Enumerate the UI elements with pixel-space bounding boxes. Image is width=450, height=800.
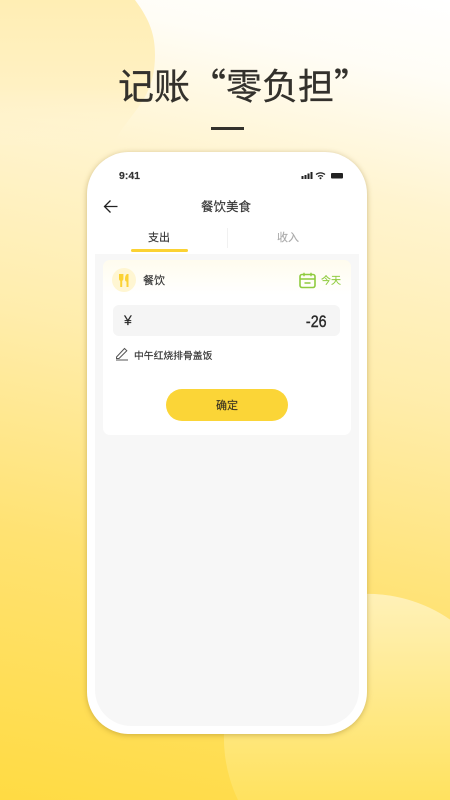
calendar icon xyxy=(299,272,316,288)
tab: expense: 支出 xyxy=(148,232,170,244)
confirm button: 确定 xyxy=(216,400,238,412)
tab: income: 收入 xyxy=(277,232,299,244)
tab: expense xyxy=(131,232,188,252)
amount field xyxy=(113,305,340,336)
screen background xyxy=(95,254,359,726)
page heading: 餐饮美食 xyxy=(201,200,251,214)
title underline xyxy=(211,127,244,130)
back arrow xyxy=(104,200,118,213)
tab divider xyxy=(227,228,228,248)
status bar icons xyxy=(302,172,343,180)
amount: -26 xyxy=(306,312,327,331)
category label: 餐饮 xyxy=(143,275,165,287)
phone mockup xyxy=(87,152,367,734)
note text: 中午红烧排骨盖饭 xyxy=(134,351,212,362)
confirm button xyxy=(166,389,288,421)
date label: 今天 xyxy=(321,276,341,287)
status bar time: 9:41 xyxy=(119,170,140,182)
pencil icon xyxy=(116,348,128,360)
currency symbol: ¥ xyxy=(124,312,132,328)
entry card xyxy=(103,260,351,435)
title: 记账“零负担” xyxy=(118,58,370,110)
category icon xyxy=(112,268,136,292)
